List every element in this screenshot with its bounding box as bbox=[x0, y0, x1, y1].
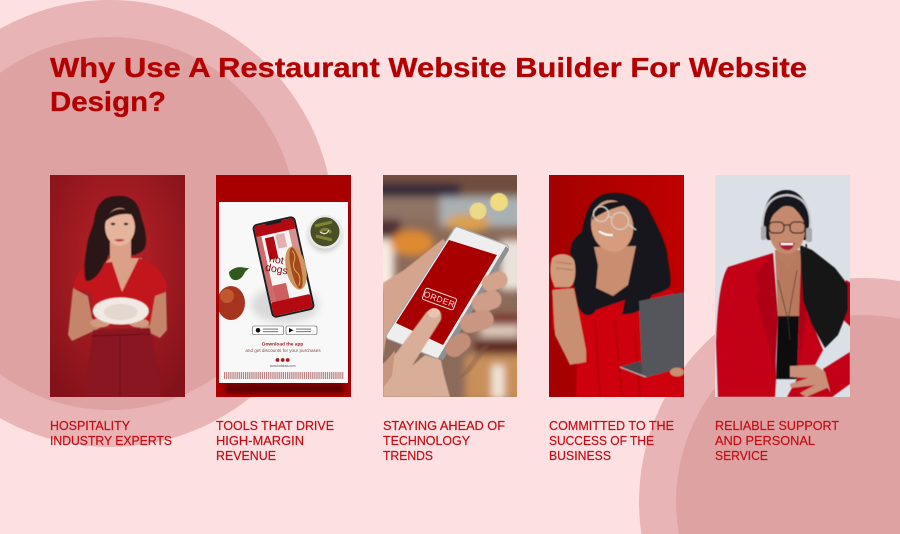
photo: hands ordering on a smartphone bbox=[383, 175, 517, 397]
glasses bbox=[594, 206, 636, 230]
phone headline: hot bbox=[268, 253, 285, 267]
photo: woman holding a white plate bbox=[50, 175, 185, 397]
caption: HIGH-MARGIN bbox=[216, 433, 304, 448]
shirt bbox=[552, 282, 684, 397]
panel: tools that drive high-margin revenue bbox=[216, 175, 351, 463]
smile bbox=[779, 242, 795, 250]
phone headline: dogs bbox=[264, 262, 289, 277]
hot dog bbox=[285, 246, 307, 290]
photo: hot dog app flyer bbox=[216, 175, 351, 397]
caption: BUSINESS bbox=[549, 448, 611, 463]
caption: RELIABLE SUPPORT bbox=[715, 418, 839, 433]
caption bbox=[216, 418, 334, 463]
app store buttons bbox=[252, 326, 317, 334]
caption bbox=[549, 418, 674, 463]
photo: support agent with headset bbox=[715, 175, 851, 397]
flyer text: www.hotdoss.com bbox=[270, 364, 296, 368]
flyer text: Download the app bbox=[262, 342, 303, 348]
caption: SERVICE bbox=[715, 448, 768, 463]
barcode strip bbox=[224, 372, 344, 379]
caption: HOSPITALITY bbox=[50, 418, 130, 433]
chest bbox=[775, 250, 801, 318]
hair bbox=[570, 193, 671, 315]
flyer text bbox=[245, 342, 321, 368]
raised arm bbox=[552, 288, 586, 365]
decorative circles: top left bbox=[0, 0, 333, 447]
decorative circles: bottom right bbox=[639, 278, 900, 534]
caption: TRENDS bbox=[383, 448, 433, 463]
phone screen bbox=[396, 240, 497, 345]
caption: AND PERSONAL bbox=[715, 433, 815, 448]
glasses bbox=[769, 222, 805, 233]
photo: cheering woman with laptop bbox=[549, 175, 684, 397]
caption: COMMITTED TO THE bbox=[549, 418, 674, 433]
caption: STAYING AHEAD OF bbox=[383, 418, 505, 433]
face bbox=[590, 199, 634, 252]
phone mockup bbox=[252, 215, 315, 319]
title: Why Use A Restaurant Website Builder For Website bbox=[50, 52, 807, 83]
panel: staying ahead of technology trends bbox=[383, 175, 517, 460]
flyer text: and get discounts for your purchases bbox=[245, 348, 321, 353]
caption bbox=[383, 418, 505, 463]
neck bbox=[778, 245, 797, 268]
laptop bbox=[620, 361, 646, 378]
black top bbox=[776, 316, 799, 379]
left hand behind the phone bbox=[383, 239, 449, 358]
jacket bbox=[716, 253, 776, 397]
caption: SUCCESS OF THE bbox=[549, 433, 654, 448]
phone headline bbox=[266, 254, 288, 276]
pointing hand bbox=[383, 309, 450, 397]
caption: INDUSTRY EXPERTS bbox=[50, 433, 172, 448]
caption bbox=[50, 418, 172, 448]
title bbox=[50, 52, 807, 117]
panel: committed to the success of the business bbox=[549, 175, 684, 463]
ponytail bbox=[800, 245, 848, 348]
panel: reliable support and personal service bbox=[715, 175, 851, 463]
caption: TECHNOLOGY bbox=[383, 433, 470, 448]
panel: hospitality industry experts bbox=[50, 175, 185, 448]
caption: TOOLS THAT DRIVE bbox=[216, 418, 334, 433]
hand on hip bbox=[790, 365, 829, 397]
order button: ORDER bbox=[422, 289, 457, 309]
neck and chest bbox=[594, 246, 636, 296]
headset bbox=[762, 193, 812, 228]
caption: REVENUE bbox=[216, 448, 276, 463]
caption bbox=[715, 418, 839, 463]
hair and face bbox=[763, 190, 809, 240]
title: Design? bbox=[50, 86, 166, 117]
phone body bbox=[386, 227, 508, 358]
right hand fingers bbox=[444, 270, 508, 377]
